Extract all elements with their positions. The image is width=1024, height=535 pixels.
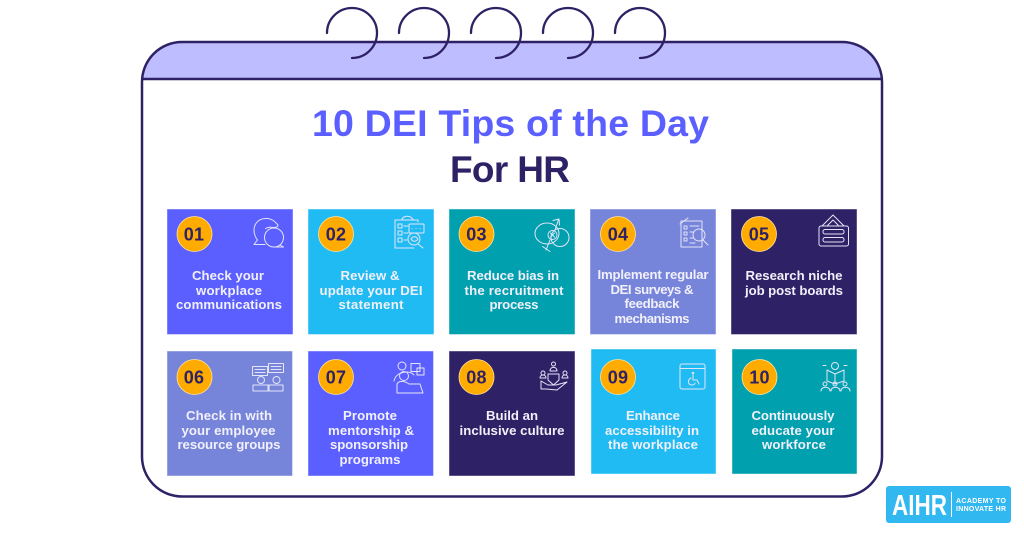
text 02: update your DEI — [320, 283, 422, 298]
text 01 — [176, 268, 282, 312]
text 04: mechanisms — [614, 311, 690, 326]
text 03 — [464, 268, 564, 312]
text 10: educate your — [752, 423, 834, 438]
text 01: Check your — [192, 268, 264, 283]
icon: job board sign — [819, 215, 848, 246]
title: For HR — [450, 149, 570, 190]
text 07 — [328, 408, 414, 467]
text 07: mentorship & — [328, 423, 414, 438]
card 09 — [591, 349, 716, 474]
text 01: communications — [176, 297, 282, 312]
text 03: Reduce bias in — [467, 268, 559, 283]
number 07: 07 — [326, 368, 346, 388]
calendar binder rings — [327, 8, 665, 58]
icon: teacher with book and group — [821, 362, 850, 391]
number 02: 02 — [326, 224, 346, 244]
text 05: job post boards — [744, 283, 843, 298]
text 09: Enhance — [626, 408, 680, 423]
text 09: accessibility in — [605, 423, 699, 438]
calendar frame — [142, 42, 882, 496]
text 04 — [598, 267, 708, 326]
AIHR logo badge: ACADEMY TO — [956, 498, 1007, 505]
text 04: feedback — [624, 296, 680, 311]
text 05 — [744, 268, 843, 298]
text 07: Promote — [343, 408, 397, 423]
number 05: 05 — [749, 224, 769, 244]
icon: hand holding people — [540, 362, 568, 390]
text 04: DEI surveys & — [610, 282, 694, 297]
AIHR logo badge — [886, 486, 1011, 523]
text 06: your employee — [182, 423, 276, 438]
text 02: Review & — [340, 268, 400, 283]
text 03: process — [490, 297, 538, 312]
text 03: the recruitment — [464, 283, 564, 298]
icon: survey with magnifier — [680, 218, 708, 247]
text 02 — [320, 268, 422, 312]
card 10 — [732, 349, 857, 474]
card 01 — [167, 209, 293, 334]
icon: gender symbols — [535, 219, 569, 252]
text 02: statement — [338, 297, 404, 312]
text 08: Build an — [486, 408, 538, 423]
title: 10 DEI Tips of the Day — [312, 102, 709, 144]
AIHR logo badge: INNOVATE HR — [956, 506, 1006, 513]
icon: people talking at laptops — [252, 364, 284, 391]
text 10: workforce — [761, 437, 826, 452]
text 07: programs — [340, 452, 400, 467]
number 03: 03 — [466, 224, 487, 244]
card 05 — [731, 209, 857, 334]
text 04: Implement regular — [598, 267, 708, 282]
text 07: sponsorship — [330, 437, 408, 452]
card 03 — [449, 209, 575, 334]
number 01: 01 — [184, 224, 204, 244]
icon: mentor and mentee — [394, 362, 424, 393]
text 06: resource groups — [178, 437, 280, 452]
text 08: inclusive culture — [460, 423, 564, 438]
text 08 — [460, 408, 564, 438]
card 02 — [308, 209, 434, 334]
card 06 — [167, 351, 292, 476]
text 10 — [752, 408, 835, 452]
number 09: 09 — [608, 368, 628, 388]
text 10: Continuously — [752, 408, 835, 423]
text 09: the workplace — [608, 437, 698, 452]
icon: chat bubbles — [254, 218, 284, 247]
AIHR logo badge: AIHR — [892, 490, 947, 522]
text 01: workplace — [195, 283, 262, 298]
text 06: Check in with — [186, 408, 272, 423]
icon: accessibility browser window — [680, 364, 705, 389]
icon: checklist review — [395, 216, 424, 248]
text 05: Research niche — [746, 268, 842, 283]
title — [312, 102, 709, 190]
number 10: 10 — [749, 368, 770, 388]
card 08 — [449, 351, 575, 476]
number 06: 06 — [184, 368, 204, 388]
number 08: 08 — [466, 368, 487, 388]
card 04 — [590, 209, 716, 334]
text 06 — [178, 408, 280, 452]
text 09 — [605, 408, 699, 452]
number 04: 04 — [608, 224, 628, 244]
card 07 — [308, 351, 434, 476]
